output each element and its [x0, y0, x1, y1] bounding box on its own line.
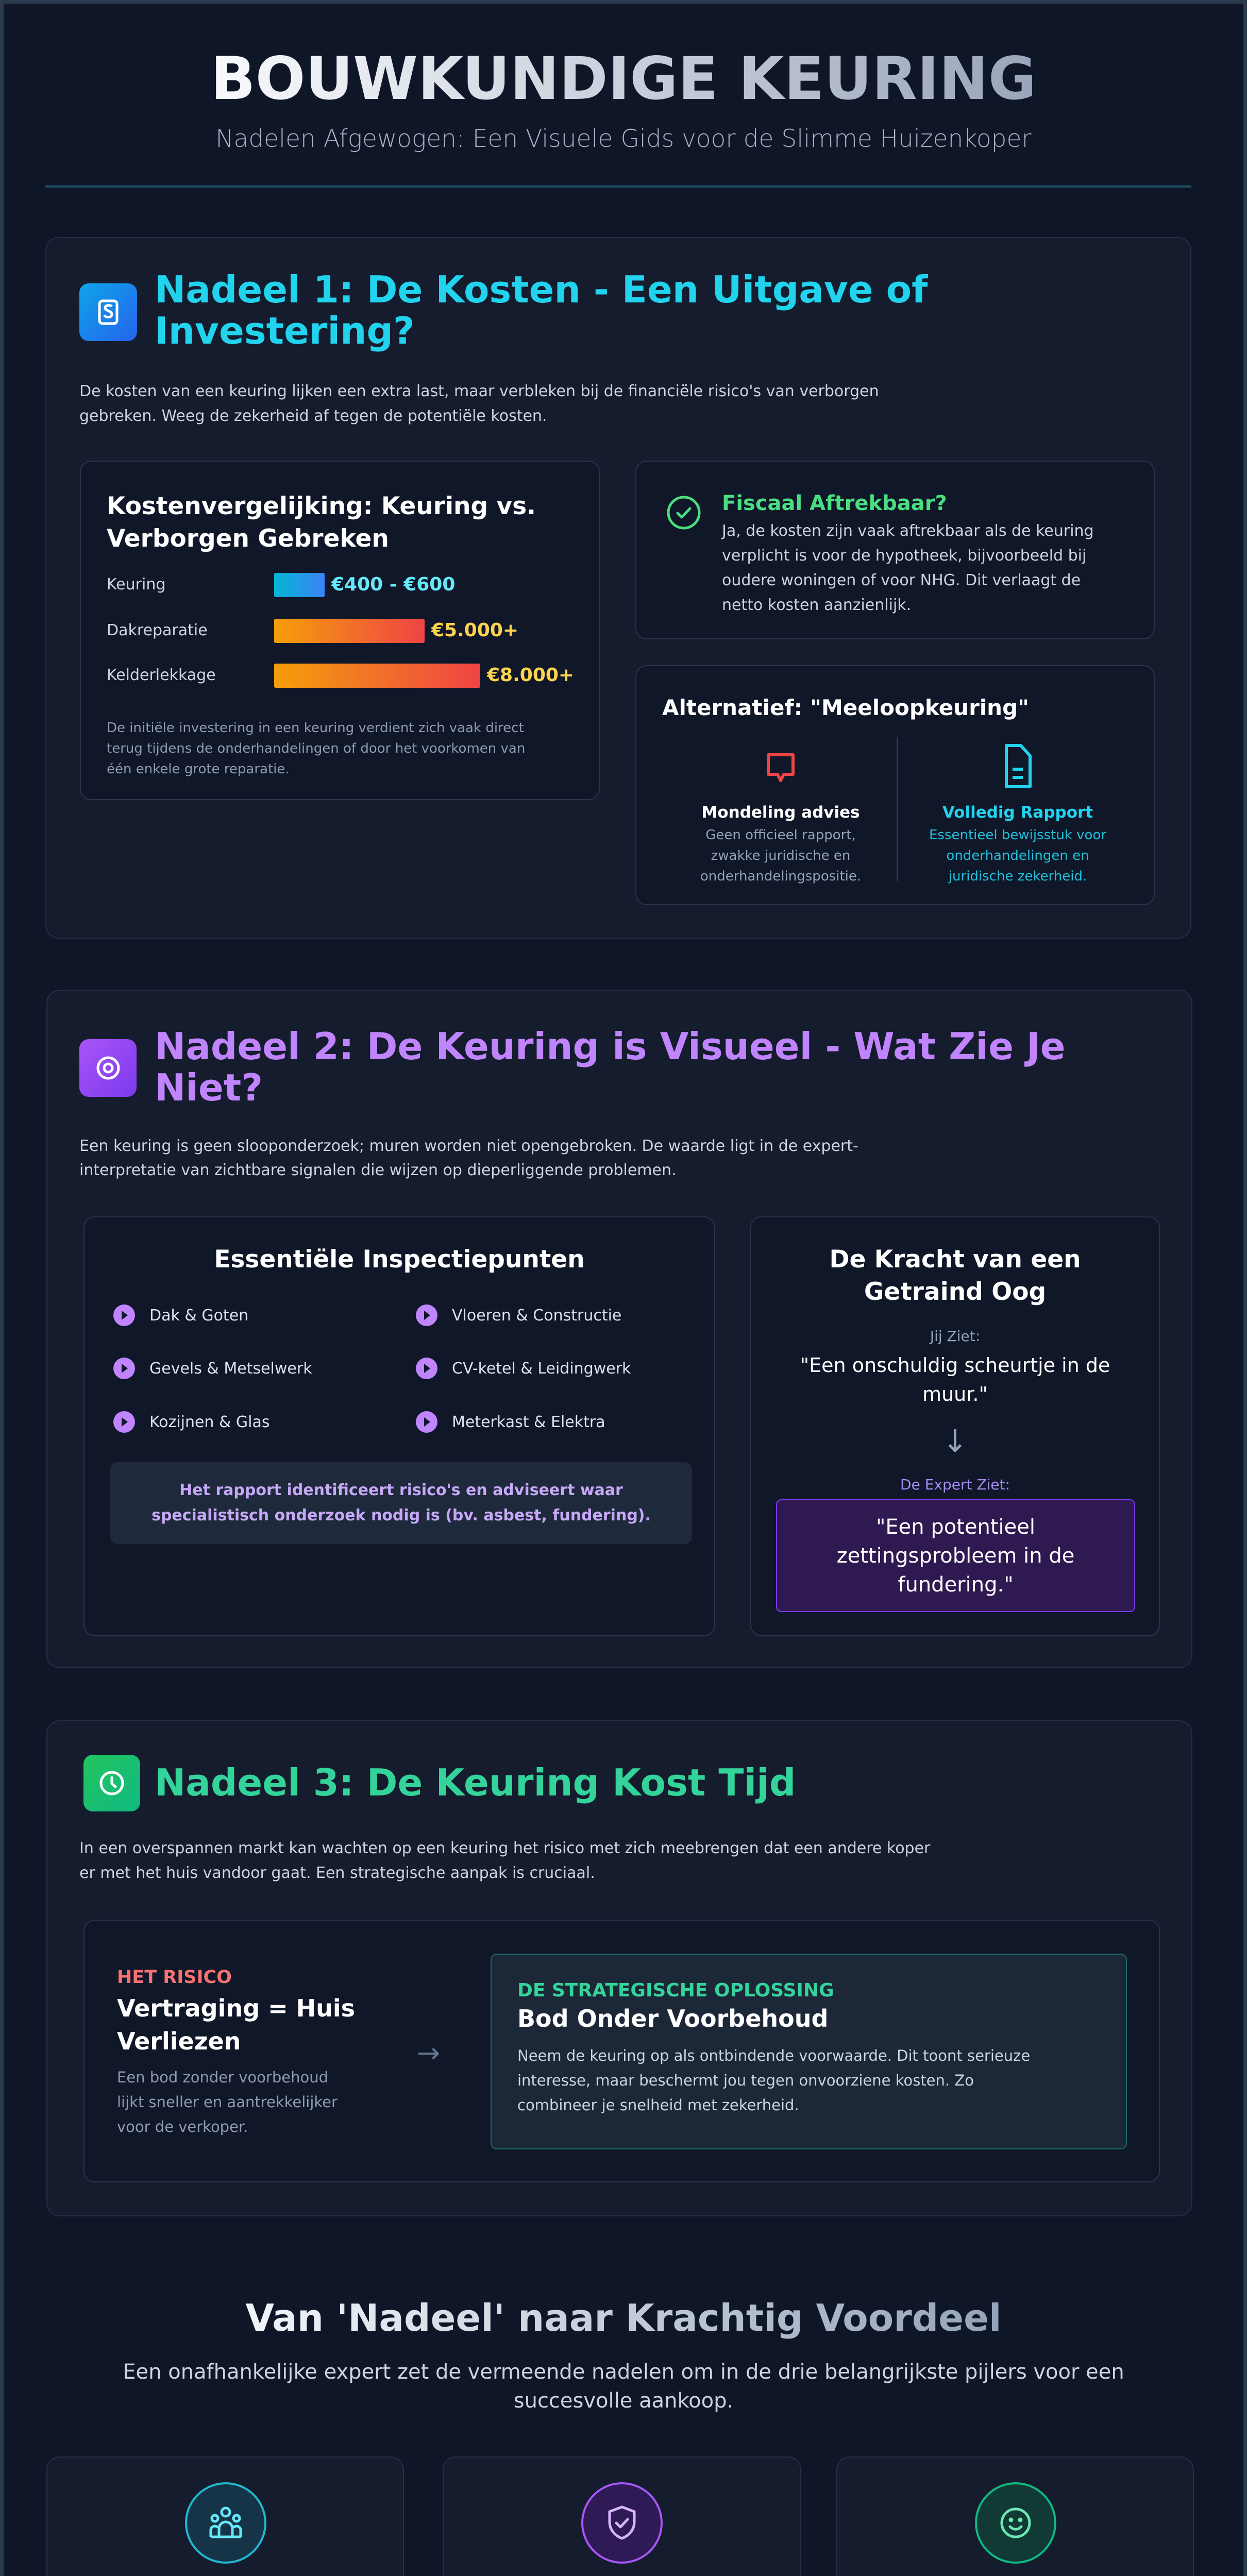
- column: mondeling advies: Geen officieel rapport,: [705, 827, 856, 843]
- column: volledig rapport: [929, 744, 1107, 884]
- list: inspectiepunten: Dak & Goten: [149, 1307, 248, 1324]
- text: het risico: voor de verkoper.: [117, 2118, 248, 2136]
- title: BOUWKUNDIGE KEURING: [211, 44, 1036, 113]
- icon: speech bubble: [767, 753, 795, 782]
- heading: getraind oog: De Kracht van een: [829, 1245, 1081, 1274]
- text: het risico: Verliezen: [117, 2027, 241, 2055]
- text: intro 3: In een overspannen markt kan wachten op een keuring het risico met zich meebrengen dat een andere koper: [79, 1839, 930, 1857]
- panel: financiele zekerheid: [443, 2456, 801, 2576]
- heading: meeloopkeuring: Alternatief: "Meeloopkeuring": [662, 695, 1029, 720]
- text: het risico: lijkt sneller en aantrekkelijker: [117, 2093, 338, 2111]
- text: intro 1: gebreken. Weeg de zekerheid af tegen de potentiële kosten.: [79, 407, 547, 425]
- bar chart: Kelderlekkage: [107, 666, 216, 684]
- heading: getraind oog: Getraind Oog: [864, 1278, 1046, 1306]
- heading: kostenvergelijking: Kostenvergelijking: Keuring vs.: [107, 492, 536, 520]
- callout: strategische oplossing: combineer je snelheid met zekerheid.: [517, 2096, 799, 2114]
- heading: nadeel 3: Nadeel 3: De Keuring Kost Tijd: [155, 1761, 796, 1804]
- icon: money clipboard: [79, 283, 137, 341]
- text: intro 1: [79, 382, 879, 425]
- list: inspectiepunten: Meterkast & Elektra: [452, 1413, 605, 1431]
- text: fiscaal: netto kosten aanzienlijk.: [722, 596, 911, 614]
- text: intro 2: interpretatie van zichtbare signalen die wijzen op dieperliggende problemen.: [79, 1161, 677, 1179]
- heading: nadeel 1: Investering?: [155, 309, 415, 352]
- icon: shield: [581, 2482, 663, 2564]
- quote: jij ziet: "Een onschuldig scheurtje in de: [800, 1354, 1110, 1377]
- icon: smiley: [975, 2482, 1056, 2564]
- heading: kostenvergelijking: Verborgen Gebreken: [107, 524, 389, 553]
- column: mondeling advies: [700, 753, 861, 884]
- bar chart: €8.000+: [487, 665, 574, 686]
- text: het risico: [117, 1967, 355, 2136]
- text: footnote: één enkele grote reparatie.: [107, 761, 290, 777]
- text: het risico: HET RISICO: [117, 1967, 232, 1988]
- text: intro 1: De kosten van een keuring lijken een extra last, maar verbleken bij de financiële risico's van verborgen: [79, 382, 879, 400]
- heading: kostenvergelijking: [107, 492, 536, 553]
- quote: jij ziet: muur.": [922, 1383, 988, 1405]
- heading: nadeel 1: [155, 268, 929, 352]
- subtitle: Nadelen Afgewogen: Een Visuele Gids voor de Slimme Huizenkoper: [215, 125, 1032, 153]
- heading: inspectiepunten: Essentiële Inspectiepunten: [214, 1245, 585, 1274]
- column: mondeling advies: zwakke juridische en: [711, 848, 850, 863]
- list: inspectiepunten: CV-ketel & Leidingwerk: [452, 1359, 631, 1378]
- text: fiscaal: verplicht is voor de hypotheek, bijvoorbeeld bij: [722, 547, 1086, 565]
- callout: rapport: [110, 1462, 692, 1544]
- panel: fiscaal aftrekbaar: [635, 461, 1155, 639]
- text: het risico: Vertraging = Huis: [117, 1994, 355, 2022]
- panel: kostenvergelijking: [80, 461, 600, 800]
- bar chart: Dakreparatie: [107, 621, 208, 639]
- quote: expert ziet: [776, 1499, 1135, 1612]
- bar chart: Keuring: [107, 575, 165, 594]
- text: het risico: Een bod zonder voorbehoud: [117, 2069, 328, 2086]
- text: conclusie: succesvolle aankoop.: [514, 2389, 733, 2413]
- text: conclusie: Een onafhankelijke expert zet de vermeende nadelen om in de drie belangrijkste pijlers voor een: [123, 2360, 1124, 2384]
- column: mondeling advies: onderhandelingspositie.: [700, 869, 861, 884]
- text: intro 2: Een keuring is geen slooponderzoek; muren worden niet opengebroken. De waarde ligt in de expert-: [79, 1137, 858, 1155]
- icon: document: [1005, 744, 1032, 788]
- panel: getraind oog: [750, 1216, 1160, 1636]
- callout: strategische oplossing: DE STRATEGISCHE OPLOSSING: [517, 1980, 834, 2001]
- heading: fiscaal: Fiscaal Aftrekbaar?: [722, 492, 947, 515]
- heading: nadeel 2: [155, 1025, 1066, 1109]
- column: volledig rapport: juridische zekerheid.: [949, 869, 1087, 884]
- panel: onderhandelingspositie: [46, 2456, 404, 2576]
- quote: jij ziet: [800, 1354, 1110, 1405]
- panel: nadeel 3 tijd: [46, 1720, 1192, 2216]
- text: footnote: terug tijdens de onderhandelingen of door het voorkomen van: [107, 741, 525, 756]
- bar chart: €5.000+: [431, 620, 518, 641]
- arrow: down: ↓: [942, 1423, 968, 1460]
- panel: gemoedsrust: [836, 2456, 1194, 2576]
- text: intro 3: er met het huis vandoor gaat. Een strategische aanpak is cruciaal.: [79, 1864, 595, 1882]
- callout: rapport: Het rapport identificeert risico's en adviseert waar: [179, 1481, 623, 1499]
- text: fiscaal: oudere woningen of voor NHG. Dit verlaagt de: [722, 571, 1081, 589]
- callout: rapport: specialistisch onderzoek nodig is (bv. asbest, fundering).: [151, 1506, 651, 1524]
- panel: nadeel 1 kosten: [45, 237, 1191, 939]
- heading: getraind oog: [829, 1245, 1081, 1306]
- text: intro 3: [79, 1839, 931, 1882]
- bar chart: [107, 573, 574, 688]
- callout: strategische oplossing: [491, 1954, 1127, 2149]
- quote: expert ziet: zettingsprobleem in de: [837, 1544, 1074, 1568]
- text: expert ziet: De Expert Ziet:: [900, 1476, 1010, 1493]
- panel: inspectiepunten: [83, 1216, 715, 1636]
- icon: people: [185, 2482, 266, 2564]
- quote: expert ziet: fundering.": [898, 1573, 1014, 1597]
- text: footnote: [107, 720, 525, 777]
- text: fiscaal: [721, 522, 1094, 614]
- heading: nadeel 2: Niet?: [155, 1066, 263, 1109]
- column: volledig rapport: Essentieel bewijsstuk voor: [929, 827, 1106, 843]
- icon: eye: [79, 1039, 137, 1097]
- panel: risico vs oplossing: [83, 1920, 1160, 2182]
- text: jij ziet: Jij Ziet:: [930, 1328, 980, 1345]
- icon: clock: [83, 1755, 140, 1811]
- heading: conclusie: Van 'Nadeel' naar Krachtig Voordeel: [245, 2296, 1002, 2340]
- heading: nadeel 1: Nadeel 1: De Kosten - Een Uitgave of: [155, 268, 928, 311]
- list: inspectiepunten: Kozijnen & Glas: [149, 1413, 270, 1431]
- heading: nadeel 2: Nadeel 2: De Keuring is Visueel - Wat Zie Je: [155, 1025, 1066, 1068]
- bar chart: €400 - €600: [331, 574, 455, 595]
- list: inspectiepunten: [113, 1304, 631, 1433]
- text: conclusie: [123, 2360, 1124, 2413]
- text: fiscaal: Ja, de kosten zijn vaak aftrekbaar als de keuring: [722, 522, 1094, 540]
- text: intro 2: [79, 1137, 858, 1179]
- arrow: right: →: [417, 2037, 440, 2069]
- column: mondeling advies: Mondeling advies: [701, 803, 860, 822]
- callout: strategische oplossing: interesse, maar beschermt jou tegen onvoorziene kosten. Zo: [517, 2072, 974, 2089]
- column: volledig rapport: Volledig Rapport: [942, 803, 1093, 822]
- text: footnote: De initiële investering in een keuring verdient zich vaak direct: [107, 720, 524, 736]
- callout: strategische oplossing: Bod Onder Voorbehoud: [517, 2005, 828, 2032]
- list: inspectiepunten: Vloeren & Constructie: [452, 1307, 621, 1324]
- panel: meeloopkeuring: [635, 665, 1155, 905]
- panel: nadeel 2 visueel: [46, 990, 1192, 1668]
- callout: strategische oplossing: Neem de keuring op als ontbindende voorwaarde. Dit toont serieuze: [517, 2047, 1030, 2064]
- quote: expert ziet: "Een potentieel: [876, 1515, 1035, 1539]
- column: volledig rapport: onderhandelingen en: [946, 848, 1089, 863]
- list: inspectiepunten: Gevels & Metselwerk: [149, 1359, 312, 1378]
- icon: check circle: [667, 496, 701, 530]
